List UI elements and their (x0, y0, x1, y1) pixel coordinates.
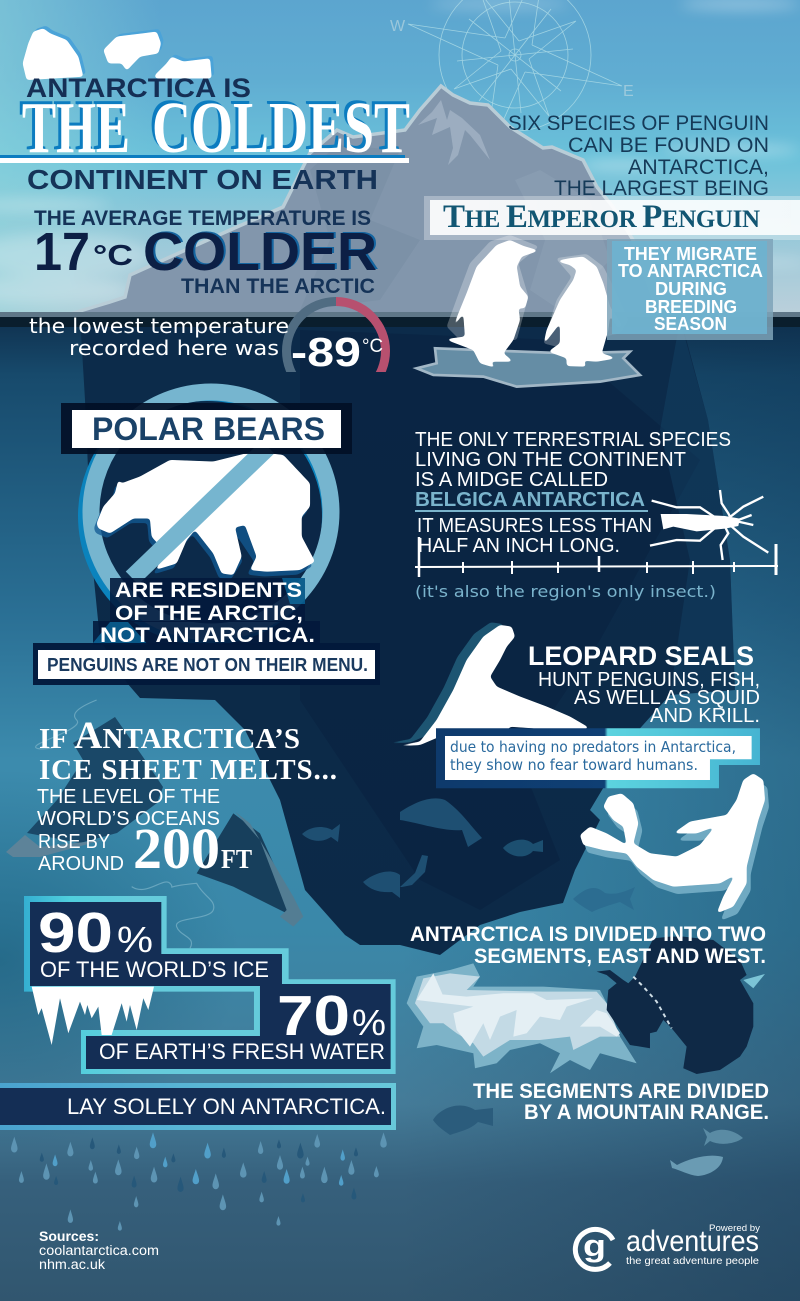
text: divided into two segments: SEGMENTS, EAST AND WEST. (474, 945, 766, 968)
text: only terrestrial species: THE ONLY TERRESTRIAL SPECIES (415, 429, 731, 451)
callout: penguins are not on their menu: PENGUINS ARE NOT ON THEIR MENU. (47, 655, 368, 675)
text: only terrestrial species: LIVING ON THE CONTINENT (415, 449, 686, 471)
no symbol ring (85, 392, 331, 638)
average temperature text: COLDER (143, 222, 377, 282)
sources: nhm.ac.uk (39, 1257, 105, 1272)
panel: leopard seals (391, 622, 760, 788)
text: hunt penguins: AND KRILL. (650, 705, 760, 727)
background: sky (0, 0, 800, 316)
panel: ice and fresh water statistics (0, 896, 396, 1130)
text: mountain range: THE SEGMENTS ARE DIVIDED (473, 1080, 769, 1103)
average temperature text: 17 (34, 222, 90, 282)
penguin text: SIX SPECIES OF PENGUIN (508, 112, 769, 135)
icon: mitten two (155, 57, 212, 78)
text: mountain range (473, 1080, 769, 1124)
average temperature text (34, 207, 379, 298)
ruler (415, 537, 778, 577)
stat: lay solely on antarctica (0, 1083, 396, 1130)
stat: 70 percent (86, 984, 391, 1069)
callout: they migrate: THEY MIGRATE (624, 244, 757, 264)
title: THE (22, 87, 130, 168)
text: ice sheet melts (37, 714, 337, 881)
callout: they migrate: BREEDING (645, 297, 737, 317)
icon: icicles (32, 987, 154, 1045)
title (0, 73, 410, 195)
text: only terrestrial species: IS A MIDGE CALLED (415, 469, 608, 491)
logo: g adventures: Powered by (709, 1223, 760, 1234)
icon: left penguin (445, 240, 539, 368)
icon: shoe on the right (197, 812, 303, 927)
sources: coolantarctica.com (39, 1243, 159, 1258)
icon: bottom fish (670, 1156, 723, 1176)
stat: 90 percent (30, 901, 282, 986)
panel: polar bears (33, 392, 380, 685)
icon: fish (363, 871, 400, 898)
average temperature text: THAN THE ARCTIC (181, 275, 375, 298)
text: are residents of the arctic: ARE RESIDENTS (115, 579, 302, 602)
icon: mitten one (103, 32, 161, 71)
fish silhouettes (302, 798, 743, 1176)
label: polar bears: POLAR BEARS (92, 411, 325, 447)
logo: g adventures: the great adventure people (626, 1255, 759, 1267)
water drops (11, 1132, 387, 1231)
background: sky left glow (0, 0, 160, 316)
stat: 70 percent: 70 (277, 984, 350, 1048)
icon: winter hat (23, 28, 83, 80)
title: CONTINENT ON EARTH (27, 164, 378, 195)
lowest temperature gauge (30, 297, 390, 372)
text: half an inch: IT MEASURES LESS THAN (417, 515, 652, 537)
icon: tuna (573, 887, 635, 912)
title decoration: hat and mittens (23, 26, 214, 80)
heading: belgica antarctica: BELGICA ANTARCTICA (415, 489, 645, 511)
sources (39, 1229, 159, 1272)
title: COLDEST (149, 84, 407, 165)
heading: if antarctica's ice sheet melts (39, 714, 337, 786)
text: hunt penguins (538, 669, 760, 727)
text: mountain range: BY A MOUNTAIN RANGE. (524, 1101, 769, 1124)
icon: shoe on the left (6, 717, 163, 857)
icon: midge (650, 490, 768, 560)
icon: grouper (503, 840, 543, 856)
map: antarctica (407, 937, 765, 1074)
text: half an inch: HALF AN INCH LONG. (418, 535, 620, 557)
text: divided into two segments: ANTARCTICA IS DIVIDED INTO TWO (410, 923, 766, 946)
banner: the emperor penguin: THE EMPEROR PENGUIN (443, 199, 760, 235)
callout: no fear toward humans: due to having no predators in Antarctica, (450, 738, 736, 756)
compass letter: E: E (623, 83, 634, 100)
text: hunt penguins: AS WELL AS SQUID (574, 687, 760, 709)
lowest temperature gauge: recorded here was (69, 336, 279, 360)
label: polar bears (61, 403, 352, 454)
logo: g adventures (575, 1223, 760, 1269)
stat: 70 percent: % (352, 1002, 386, 1043)
lowest temperature gauge: -89 (291, 329, 361, 375)
waterline band (0, 312, 800, 327)
icon: small fish (703, 1128, 743, 1146)
callout: they migrate: SEASON (654, 314, 727, 334)
icon: leopard seal (391, 622, 590, 747)
ice floe (417, 348, 640, 387)
stat: 90 percent: % (117, 919, 153, 960)
iceberg above water (70, 86, 660, 316)
heading: if antarctica's ice sheet melts: ICE SHEET MELTS... (39, 754, 337, 786)
icon: polar bear (94, 452, 315, 580)
icon: right penguin (543, 257, 622, 367)
penguin text: ANTARCTICA, (628, 156, 769, 179)
icon: fish (302, 824, 340, 842)
callout: they migrate: DURING (655, 279, 727, 299)
penguins (445, 235, 628, 368)
text: are residents of the arctic: OF THE ARCTIC, (115, 602, 303, 625)
text: only insect: (it's also the region's only insect.) (415, 582, 716, 601)
stat: 70 percent: OF EARTH’S FRESH WATER (99, 1039, 385, 1064)
callout: penguins are not on their menu (33, 643, 380, 685)
number: 200 ft: FT (221, 844, 252, 874)
banner: the emperor penguin (424, 196, 800, 240)
stat: 90 percent: OF THE WORLD’S ICE (40, 957, 269, 982)
sea shade right (400, 316, 800, 1301)
callout: they migrate: TO ANTARCTICA (618, 261, 763, 281)
text: divided into two segments (410, 923, 766, 968)
text: level of the oceans: WORLD’S OCEANS (37, 808, 220, 830)
compass rose (408, 0, 622, 163)
icon: g adventures ring: g (583, 1228, 606, 1263)
text: level of the oceans (37, 786, 220, 875)
background: clouds (0, 0, 800, 304)
title: THE (19, 84, 127, 165)
icon: g adventures ring (575, 1228, 613, 1269)
stat: 90 percent: 90 (38, 901, 113, 965)
icon: big fish (400, 798, 482, 847)
average temperature text: °C (93, 240, 133, 272)
average temperature text: THE AVERAGE TEMPERATURE IS (34, 207, 371, 230)
lowest temperature gauge: °C (362, 336, 383, 357)
title: COLDEST (152, 87, 410, 168)
number: 200 ft: 200 (133, 816, 220, 881)
lowest temperature gauge: the lowest temperature (29, 314, 289, 338)
panel: midge (415, 429, 778, 601)
no symbol slash (132, 447, 268, 578)
icon: grouper (433, 1105, 493, 1135)
text: level of the oceans: RISE BY (38, 831, 110, 853)
penguin text (508, 112, 769, 200)
compass letter: S: S (477, 172, 488, 189)
callout: no fear toward humans: they show no fear toward humans. (450, 756, 698, 774)
callout: they migrate (607, 239, 773, 340)
title: ANTARCTICA IS (26, 73, 251, 103)
stat: lay solely on antarctica: LAY SOLELY ON ANTARCTICA. (67, 1094, 386, 1119)
text: half an inch (417, 515, 652, 557)
iceberg below water (80, 316, 735, 955)
average temperature text: COLDER (145, 221, 379, 281)
heading: leopard seals: LEOPARD SEALS (528, 641, 754, 671)
heading: if antarctica's ice sheet melts: IF ANTARCTICA’S (39, 714, 300, 757)
penguin text: THE LARGEST BEING (554, 177, 769, 200)
callout: no fear toward humans (436, 728, 760, 788)
lower seal (580, 773, 769, 921)
sea shade left (0, 770, 240, 1150)
penguin text: CAN BE FOUND ON (568, 134, 769, 157)
text: level of the oceans: AROUND (38, 853, 124, 875)
icon: fish (400, 855, 428, 887)
compass letter: W: W (390, 18, 406, 35)
text: hunt penguins: HUNT PENGUINS, FISH, (538, 669, 760, 691)
text: only terrestrial species (415, 429, 731, 491)
sea background (0, 316, 800, 1301)
text: are residents of the arctic: NOT ANTARCTICA. (100, 624, 315, 647)
text: are residents of the arctic (93, 578, 320, 647)
sources: Sources: (39, 1229, 99, 1244)
icon: shoelaces (36, 700, 214, 948)
text: level of the oceans: THE LEVEL OF THE (37, 786, 220, 808)
logo: g adventures: adventures (626, 1225, 759, 1258)
